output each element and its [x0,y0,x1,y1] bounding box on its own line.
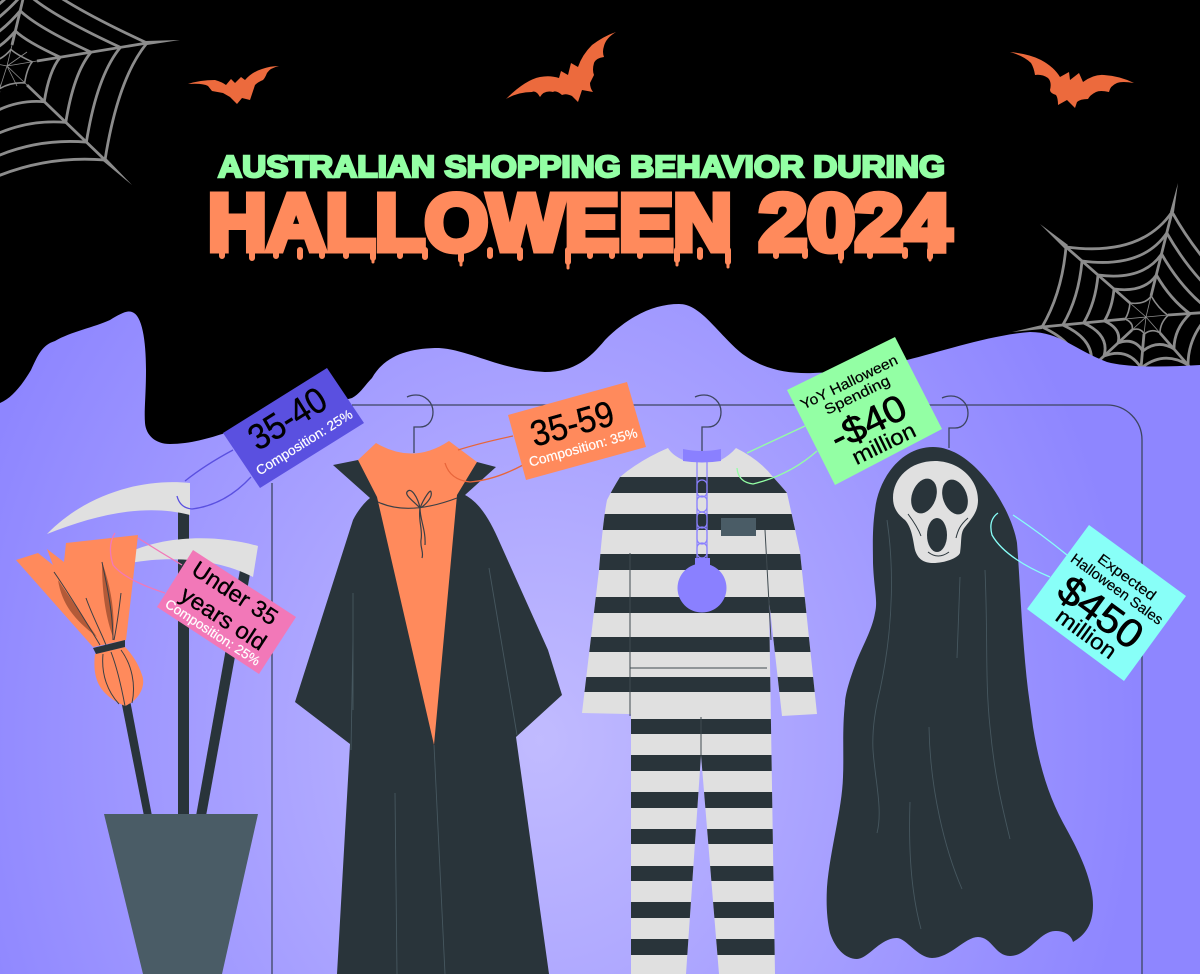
tag: 35-40 composition 25%: 35-40 [240,379,334,458]
seams [630,530,771,755]
tag: under 35 years old composition 25%: years old [176,581,271,655]
broom handle [121,700,152,816]
tag: 35-59 composition 35%: Composition: 35% [527,425,639,470]
scythe blade top [47,482,190,534]
cloak body [295,460,562,974]
tag: 35-59 composition 35%: 35-59 [526,392,619,455]
tag: expected Halloween sales $450 million [1027,525,1186,681]
tag: YoY Halloween spending -$40 million: Spending [822,373,893,419]
icon: bat centre [506,32,616,102]
broom bristles [16,535,138,647]
title line 1: AUSTRALIAN SHOPPING BEHAVIOR DURING [218,149,945,184]
chain [697,461,707,558]
ghost folds [873,520,1010,929]
orange shirt [358,441,477,745]
broom shadow [58,562,114,637]
scythe blade lower [130,538,258,577]
scythe pole rear [178,505,189,817]
tag: expected Halloween sales $450 million: Halloween Sales [1067,551,1166,629]
tag: YoY Halloween spending -$40 million [787,337,942,485]
stripes [584,477,815,955]
title line 2: 2024 [759,178,952,267]
tag: YoY Halloween spending -$40 million: -$40 [823,386,913,458]
neck tie [378,490,457,558]
tag: under 35 years old composition 25%: Composition: 25% [163,596,263,669]
tag: 35-59 composition 35% [508,382,646,480]
eyes and mouth [907,475,972,552]
tag: 35-40 composition 25%: Composition: 25% [253,407,355,478]
tag string: expected sales [991,513,1067,577]
drips [222,250,930,262]
tag: YoY Halloween spending -$40 million: YoY Halloween [798,352,901,413]
icon: hanger two [695,395,721,453]
tag string: YoY spending [737,426,817,484]
icon: bat right [1010,52,1134,108]
skull [893,461,978,563]
tag: YoY Halloween spending -$40 million: million [848,417,920,470]
tag string: under 35 [110,533,182,593]
icon: cobweb top left [0,0,180,191]
tag string: 35-40 [177,450,251,509]
tag: 35-40 composition 25% [223,368,364,488]
tag: expected Halloween sales $450 million: $450 [1049,567,1151,658]
icon: ghost scream costume [827,447,1093,959]
icon: bat left [188,66,279,104]
ball [678,558,726,612]
suit base [582,448,817,974]
broom head [94,647,143,706]
broom band [93,640,125,654]
broom lines [54,562,134,706]
icon: vampire cloak [295,441,562,974]
title line 2: HALLOWEEN [208,178,732,267]
cloak folds [351,568,517,974]
purple wave background [0,304,1200,974]
tag: under 35 years old composition 25%: Under 35 [187,556,283,630]
clothes rail [272,405,1142,974]
pocket [721,518,756,536]
icon: prisoner costume [582,448,817,974]
collar [683,449,721,462]
tag: under 35 years old composition 25% [157,550,296,674]
tag: expected Halloween sales $450 million: Expected [1094,551,1159,604]
icon: hanger three [942,396,968,448]
ghost robe [827,447,1093,959]
tag: expected Halloween sales $450 million: million [1051,603,1122,664]
scythe pole right [196,570,250,816]
skull creases [908,514,968,556]
icon: scythes and broom in pot [16,482,258,974]
drip tips [373,256,930,268]
tag string: 35-59 [445,436,523,482]
title line 2 [208,178,952,267]
icon: cobweb bottom right [1012,183,1200,402]
icon: hanger one [407,395,433,453]
pot [104,814,258,974]
